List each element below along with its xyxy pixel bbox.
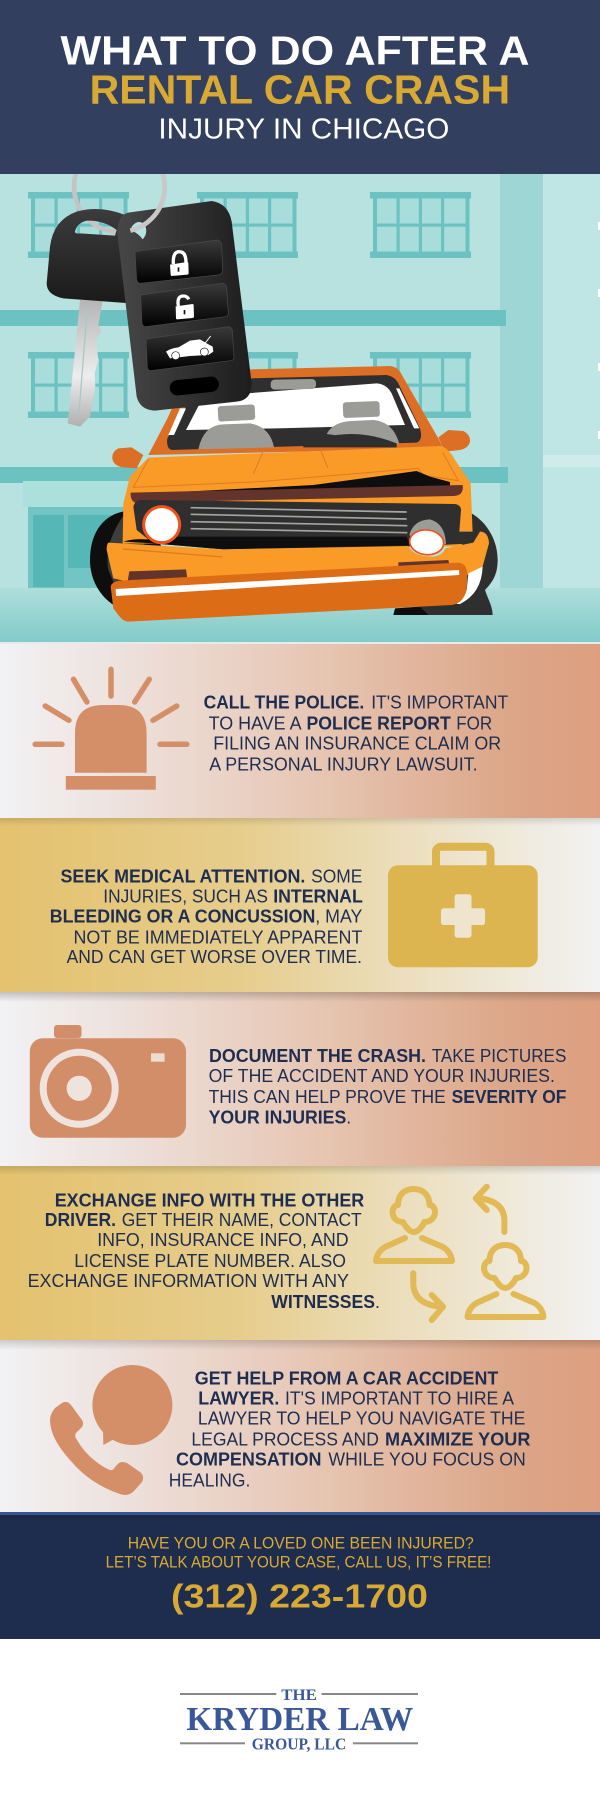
logo: The Kryder Law Group: KRYDER LAW [186, 1701, 413, 1738]
text: exchange info [28, 1190, 380, 1312]
remote buttons [135, 240, 234, 371]
arrow: up [476, 1187, 504, 1232]
text: exchange info: INFO, INSURANCE INFO, AND [97, 1230, 349, 1250]
car keys and remote fob [47, 141, 252, 427]
title line 2: RENTAL CAR CRASH [90, 66, 510, 112]
text: document the crash: DOCUMENT THE CRASH. [209, 1046, 426, 1066]
text: document the crash [209, 1046, 566, 1127]
text: call the police [204, 692, 508, 774]
text: get help from a lawyer: LAWYER. [198, 1388, 279, 1408]
crashed orange car [90, 366, 498, 622]
text: seek medical attention: BLEEDING OR A CONCUSSION [50, 906, 315, 926]
unlock icon [176, 296, 194, 319]
lock icon [170, 252, 189, 276]
text: exchange info: LICENSE PLATE NUMBER. ALSO [74, 1251, 346, 1271]
text: seek medical attention: SOME [311, 866, 362, 886]
text: call the police: A PERSONAL INJURY LAWSUIT. [209, 754, 478, 774]
text: get help from a lawyer: HEALING. [169, 1470, 250, 1490]
text: document the crash: TAKE PICTURES [432, 1046, 566, 1066]
text: seek medical attention: NOT BE IMMEDIATELY APPARENT [74, 927, 362, 947]
call to action text: LET’S TALK ABOUT YOUR CASE, CALL US, IT’S FREE! [106, 1553, 491, 1571]
icon: two people exchanging info [376, 1187, 544, 1320]
text: seek medical attention: INTERNAL [273, 886, 363, 906]
text: get help from a lawyer: LEGAL PROCESS AND [191, 1429, 379, 1449]
icon: siren [35, 669, 187, 790]
panel: call the police [0, 644, 600, 818]
text: get help from a lawyer: IT'S IMPORTANT TO HIRE A [285, 1388, 514, 1408]
text: exchange info: . [375, 1292, 380, 1312]
title line 3: INJURY IN CHICAGO [158, 114, 449, 146]
title line 1: WHAT TO DO AFTER A [60, 27, 530, 73]
text: document the crash: . [346, 1107, 351, 1127]
text: document the crash: SEVERITY OF [452, 1087, 566, 1107]
text: get help from a lawyer [169, 1368, 530, 1490]
icon: first aid kit [388, 847, 538, 967]
icon: phone and speech bubble [50, 1365, 172, 1495]
text: get help from a lawyer: MAXIMIZE YOUR [385, 1429, 530, 1449]
remote body [117, 201, 252, 411]
text: get help from a lawyer: GET HELP FROM A CAR ACCIDENT [195, 1368, 498, 1388]
panel: seek medical attention [0, 818, 600, 992]
hero illustration: city street, crashed car and keys [0, 141, 600, 645]
text: call the police: POLICE REPORT [306, 713, 451, 733]
text: document the crash: THIS CAN HELP PROVE THE [209, 1087, 446, 1107]
text: seek medical attention: SEEK MEDICAL ATTENTION. [60, 866, 305, 886]
icon: camera [30, 1025, 186, 1138]
key head [47, 209, 130, 303]
phone number: (312) 223-1700 [171, 1578, 428, 1615]
panel: exchange info [0, 1166, 600, 1340]
text: call the police: TO HAVE A [209, 713, 302, 733]
panel: document the crash [0, 992, 600, 1166]
text: seek medical attention: AND CAN GET WORSE OVER TIME. [67, 947, 362, 967]
text: exchange info: DRIVER. [45, 1210, 116, 1230]
text: call the police: IT'S IMPORTANT [371, 692, 508, 712]
text: exchange info: GET THEIR NAME, CONTACT [122, 1210, 362, 1230]
trunk icon [166, 336, 213, 360]
call to action panel [0, 1512, 600, 1639]
text: seek medical attention [50, 866, 363, 967]
text: get help from a lawyer: LAWYER TO HELP YOU NAVIGATE THE [198, 1408, 525, 1428]
call to action text [106, 1534, 491, 1571]
key blade [68, 300, 103, 427]
text: call the police: CALL THE POLICE. [204, 692, 364, 712]
text: document the crash: OF THE ACCIDENT AND YOUR INJURIES. [209, 1066, 555, 1086]
text: call the police: FILING AN INSURANCE CLAIM OR [213, 733, 501, 753]
panel: get help from a lawyer [0, 1340, 600, 1512]
text: exchange info: WITNESSES [271, 1292, 375, 1312]
logo: The Kryder Law Group: GROUP, LLC [252, 1734, 346, 1753]
building background [0, 170, 600, 645]
text: get help from a lawyer: COMPENSATION [176, 1449, 322, 1469]
text: exchange info: EXCHANGE INFO WITH THE OTHER [55, 1190, 364, 1210]
call to action text: HAVE YOU OR A LOVED ONE BEEN INJURED? [128, 1534, 474, 1552]
logo: The Kryder Law Group: THE [281, 1687, 317, 1704]
arrow: down [413, 1273, 443, 1320]
text: document the crash: YOUR INJURIES [209, 1107, 346, 1127]
text: seek medical attention: INJURIES, SUCH AS [103, 886, 268, 906]
text: seek medical attention: , MAY [315, 906, 362, 926]
logo: The Kryder Law Group [180, 1687, 418, 1753]
header panel [0, 0, 600, 174]
text: exchange info: EXCHANGE INFORMATION WITH ANY [28, 1271, 349, 1291]
text: call the police: FOR [456, 713, 492, 733]
text: get help from a lawyer: WHILE YOU FOCUS ON [328, 1449, 526, 1469]
